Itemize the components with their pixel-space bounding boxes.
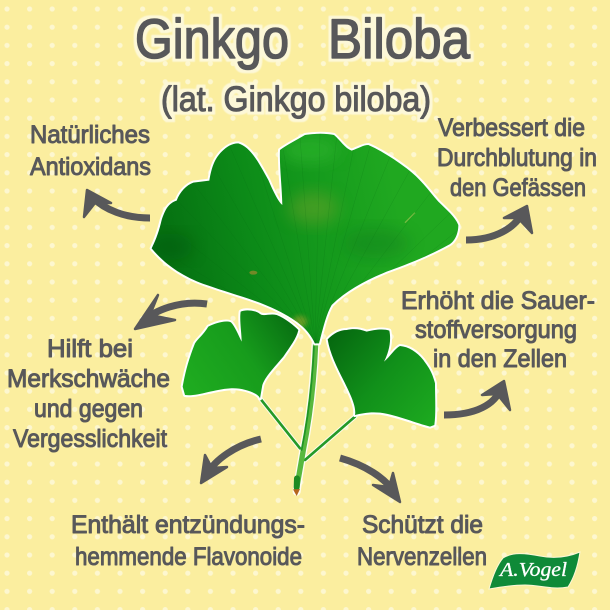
left small leaf xyxy=(183,310,298,398)
text: Erhöht die Sauerstoffversorgung in den Zellen xyxy=(401,287,595,373)
logo: A.Vogel: A.Vogel xyxy=(498,559,567,581)
text: Erhöht die Sauerstoffversorgung in den Zellen: stoffversorgung xyxy=(415,316,577,344)
text: Hilft bei Merkschwäche und gegen Vergesslichkeit: Hilft bei xyxy=(47,335,133,363)
text: Hilft bei Merkschwäche und gegen Vergesslichkeit: Vergesslichkeit xyxy=(13,425,167,453)
text: Hilft bei Merkschwäche und gegen Vergesslichkeit: und gegen xyxy=(34,395,143,423)
arrow: to Merkschwäche xyxy=(135,295,207,329)
arrow: to Durchblutung xyxy=(466,206,532,240)
right small leaf xyxy=(328,329,435,427)
arrow: to Flavonoide xyxy=(201,439,261,483)
text: Verbessert die Durchblutung in den Gefässen: Verbessert die xyxy=(438,114,585,142)
logo: A.Vogel xyxy=(489,552,580,589)
title: Biloba xyxy=(328,7,471,70)
title: Ginkgo xyxy=(135,7,289,70)
text: Natürliches Antioxidans xyxy=(30,121,151,181)
arrow: to Antioxidans xyxy=(84,190,150,218)
text: Verbessert die Durchblutung in den Gefässen: Durchblutung in xyxy=(437,144,597,172)
main leaf xyxy=(147,133,458,343)
text: Erhöht die Sauerstoffversorgung in den Zellen: Erhöht die Sauer- xyxy=(401,287,595,315)
text: Erhöht die Sauerstoffversorgung in den Zellen: in den Zellen xyxy=(433,345,567,373)
text: Natürliches Antioxidans: Natürliches xyxy=(30,121,150,149)
text: Schützt die Nervenzellen: Nervenzellen xyxy=(357,543,487,571)
arrow: to Sauerstoffversorgung xyxy=(444,381,510,415)
text: Natürliches Antioxidans: Antioxidans xyxy=(30,153,151,181)
text: Schützt die Nervenzellen: Schützt die xyxy=(362,511,483,539)
text: Enthält entzündungshemmende Flavonoide: Enthält entzündungs- xyxy=(71,511,305,539)
title xyxy=(135,7,471,70)
text: Enthält entzündungshemmende Flavonoide xyxy=(71,511,305,571)
stems xyxy=(260,343,355,492)
text: Hilft bei Merkschwäche und gegen Vergesslichkeit: Merkschwäche xyxy=(7,365,170,393)
text: Schützt die Nervenzellen xyxy=(357,511,487,571)
text: Verbessert die Durchblutung in den Gefässen: den Gefässen xyxy=(450,174,586,202)
subtitle: (lat. Ginkgo biloba) xyxy=(161,80,431,119)
stem tip xyxy=(293,489,300,496)
ginkgo leaf illustration xyxy=(147,133,458,496)
text: Enthält entzündungshemmende Flavonoide: hemmende Flavonoide xyxy=(75,543,302,571)
text: Hilft bei Merkschwäche und gegen Vergesslichkeit xyxy=(7,335,170,453)
text: Verbessert die Durchblutung in den Gefässen xyxy=(437,114,597,202)
arrow: to Nervenzellen xyxy=(340,458,400,502)
